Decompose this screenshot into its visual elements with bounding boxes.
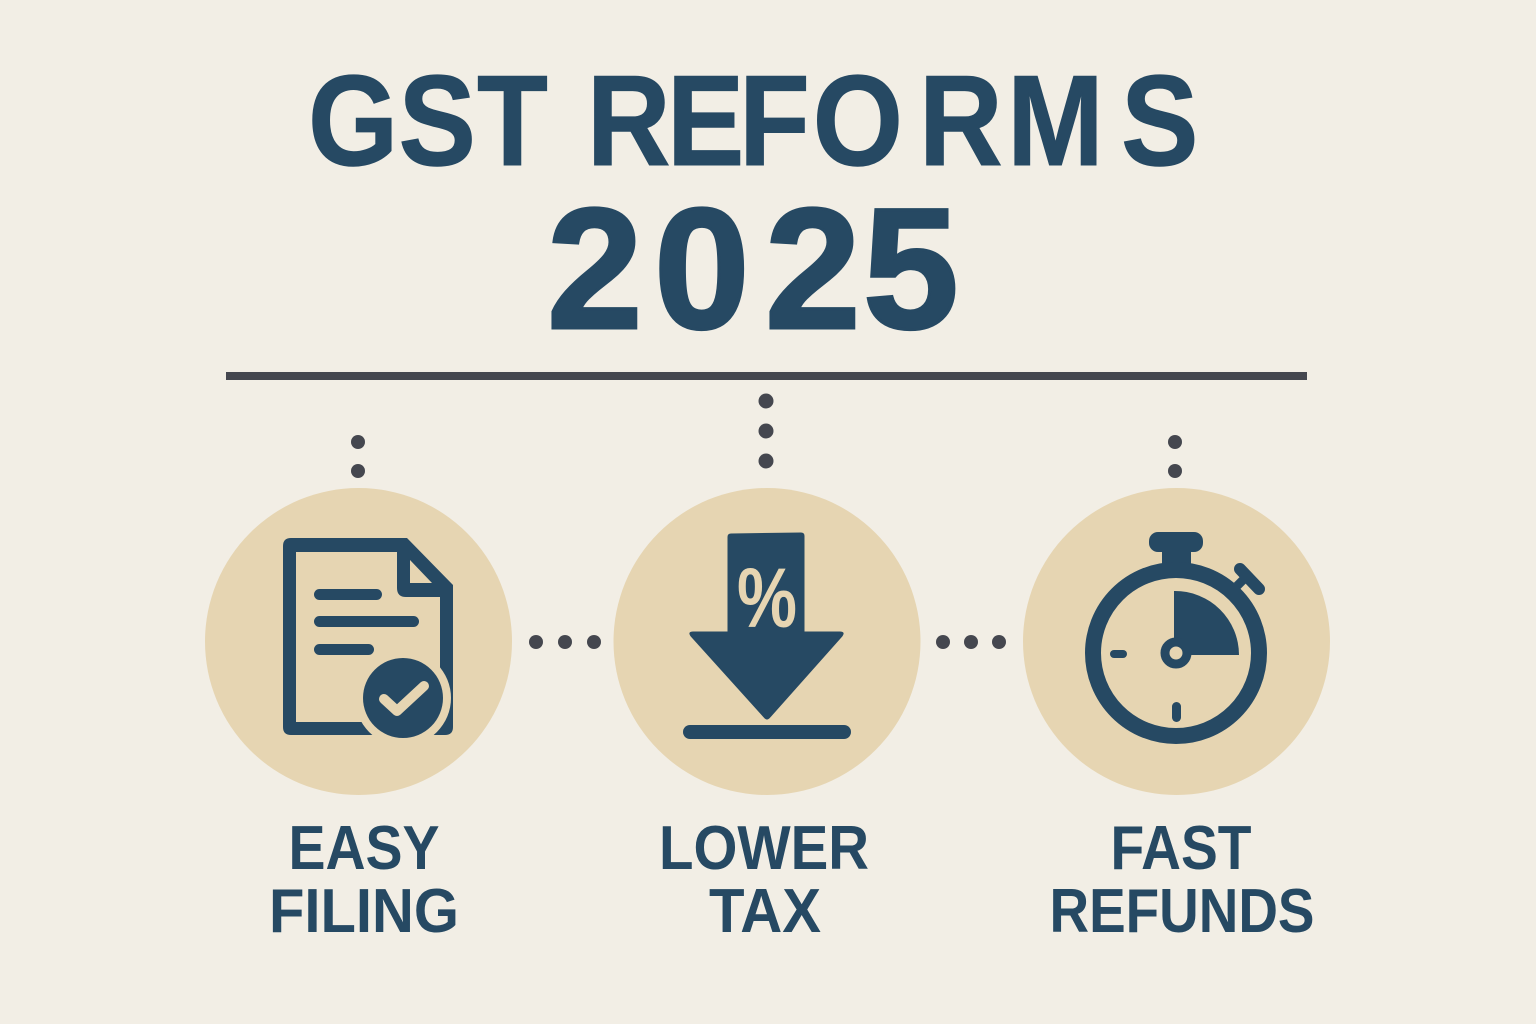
label: lower tax: TAX [709,877,821,946]
dotted connector: between first and second [529,635,601,649]
horizontal rule [226,372,1307,380]
label: lower tax [659,814,869,946]
dotted connector: easy filing [351,435,365,478]
label: easy filing: FILING [269,877,459,946]
dotted connector: lower tax [758,394,774,468]
label: easy filing: EASY [288,814,440,883]
icon: lower tax arrow: % [737,551,797,645]
dotted connector: between second and third [936,635,1006,649]
icon: lower tax arrow [614,488,920,795]
label: fast refunds: FAST [1110,814,1252,883]
title: GST Reforms: GST REFORMS [308,49,1198,193]
title: year 2025: 2025 [547,173,959,365]
icon: easy filing document [205,488,512,795]
label: fast refunds [1050,814,1314,946]
label: fast refunds: REFUNDS [1050,877,1314,946]
icon: fast refunds stopwatch [1023,488,1330,795]
label: lower tax: LOWER [659,814,869,883]
label: easy filing [269,814,459,946]
dotted connector: fast refunds [1168,435,1182,478]
